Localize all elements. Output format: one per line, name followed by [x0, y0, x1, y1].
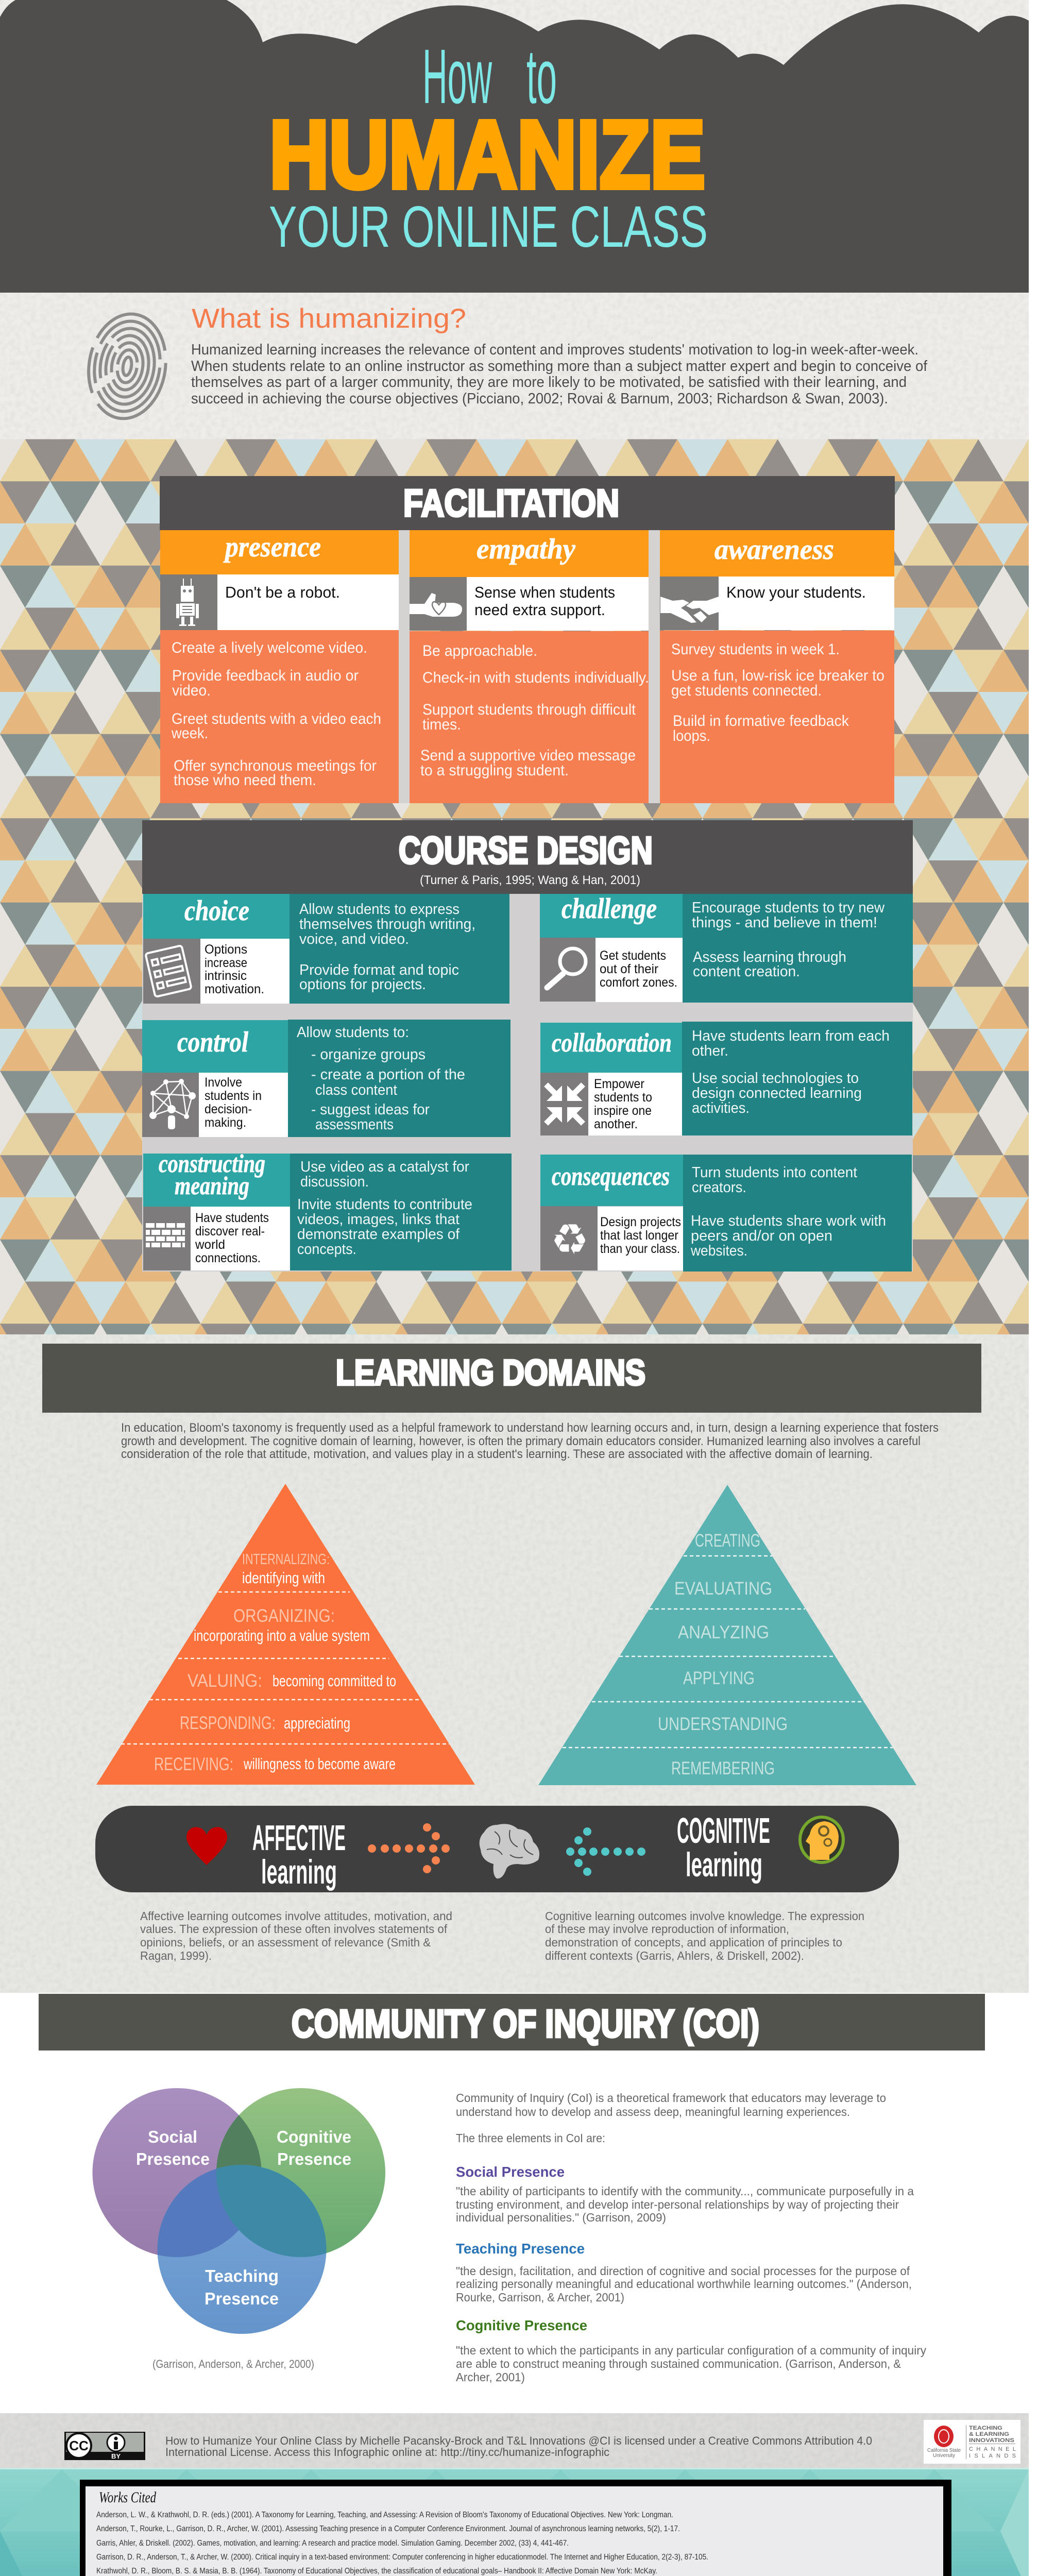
panel: learning domains: [42, 1344, 981, 1962]
heading: constructing meaning: constructing: [159, 1149, 265, 1178]
callout: sense when students need support: need extra support.: [474, 601, 605, 619]
text: consequences tips: [690, 1164, 886, 1259]
panel: facilitation: [160, 476, 895, 803]
panel: works cited background: [0, 2468, 1029, 2576]
column: presence: [160, 530, 399, 803]
callout: involve students: decision-: [205, 1102, 252, 1116]
block: cognitive presence definition: [456, 2317, 926, 2384]
heading: constructing meaning: [159, 1149, 265, 1200]
text: CoI explanation: [456, 2091, 886, 2145]
label: valuing: [188, 1671, 396, 1691]
callout: comfort zones: [600, 948, 677, 990]
heading bar: learning domains: LEARNING DOMAINS: [336, 1352, 645, 1393]
text: empathy tips: times.: [422, 716, 461, 733]
block: cognitive presence definition: are able to construct meaning through sustained communication. (Garrison, Anderson, &: [456, 2357, 901, 2370]
text: awareness tips: Build in formative feedback: [673, 713, 849, 730]
heading bar: facilitation: [160, 476, 895, 530]
text: affective outcomes: Affective learning outcomes involve attitudes, motivation, and: [140, 1909, 452, 1923]
callout: comfort zones: out of their: [600, 962, 658, 976]
text: empathy tips: to a struggling student.: [420, 762, 569, 779]
text: humanizing definition: Humanized learning increases the relevance of content and improves students' motivation to log-in week-after-week.: [191, 342, 918, 358]
text: bloom's taxonomy intro: growth and development. The cognitive domain of learning, however, is often the primary domain educators consider. Humanized learning also involves a careful: [121, 1434, 921, 1448]
callout: real-world connections: [195, 1211, 269, 1265]
chart: cognitive pyramid: [538, 1485, 916, 1785]
heading: works cited: Works Cited: [99, 2489, 157, 2506]
text: choice tips: options for projects.: [299, 976, 426, 993]
panel: header with cloud silhouette and title: to: [526, 33, 557, 120]
callout: design projects: than your class.: [600, 1242, 680, 1256]
callout: empower students: Empower: [594, 1077, 644, 1091]
labels: cognitive levels: REMEMBERING: [671, 1758, 775, 1778]
block: teaching presence definition: realizing personally meaningful and educational worthwhile learning outcomes." (Anderson,: [456, 2277, 912, 2291]
text: license statement: How to Humanize Your Online Class by Michelle Pacansky-Brock and T&L Innovations @CI is licensed under a Creative Commons Attribution 4.0: [165, 2434, 872, 2447]
callout: know your students: Know your students.: [726, 583, 866, 601]
text: control tips: [297, 1024, 465, 1133]
text: challenge tips: Assess learning through: [693, 949, 846, 965]
title: HUMANIZE: HUMANIZE: [269, 101, 705, 208]
text: consequences tips: Have students share work with: [691, 1213, 886, 1229]
text: awareness tips: Use a fun, low-risk ice breaker to: [671, 667, 884, 684]
panel: affective and cognitive pill: COGNITIVE: [677, 1810, 770, 1851]
text: collaboration tips: Have students learn from each: [692, 1028, 890, 1044]
text: constructing meaning tips: concepts.: [297, 1241, 356, 1258]
heading: what is humanizing: What is humanizing?: [192, 303, 466, 334]
callout: involve students: [205, 1075, 262, 1130]
callout: empower students: inspire one: [594, 1104, 652, 1118]
heading: control: control: [177, 1026, 248, 1058]
text: consequences tips: Turn students into content: [692, 1164, 857, 1181]
text: constructing meaning tips: videos, images, links that: [297, 1211, 460, 1228]
panel: affective and cognitive pill: AFFECTIVE: [252, 1818, 346, 1858]
callout: empower students: students to: [594, 1090, 652, 1105]
block: social presence definition: [456, 2164, 914, 2224]
panel: affective and cognitive pill: [95, 1806, 899, 1892]
label: internalizing: INTERNALIZING:: [242, 1551, 330, 1568]
text: presence tips: video.: [172, 682, 211, 699]
heading bar: course design: [142, 820, 913, 894]
logo: teaching and learning innovations: TEACHING: [969, 2425, 1002, 2431]
label: responding: appreciating: [284, 1714, 350, 1732]
text: awareness tips: Survey students in week 1.: [671, 641, 840, 658]
heading bar: course design: COURSE DESIGN: [399, 829, 653, 872]
text: references: Garris, Ahler, & Driskell. (2002). Games, motivation, and learning: A research and practice model. Simulation Gaming. December 2002, (33) 4, 441-467.: [96, 2539, 569, 2548]
callout: don't be a robot: Don't be a robot.: [225, 583, 340, 601]
card: control: [142, 1020, 511, 1137]
callout: options increase motivation: intrinsic: [205, 969, 247, 983]
callout: involve students: Involve: [205, 1075, 242, 1090]
text: presence tips: week.: [171, 725, 208, 742]
text: venn citation: (Garrison, Anderson, & Archer, 2000): [152, 2358, 314, 2370]
arrow: teal dots: [566, 1827, 645, 1876]
heading: collaboration: collaboration: [552, 1028, 672, 1058]
icon: network person: [149, 1079, 196, 1129]
column: awareness: [660, 530, 894, 803]
text: cognitive outcomes: demonstration of concepts, and application of principles to: [545, 1936, 842, 1949]
icon: magnifying glass: [547, 948, 586, 988]
callout: design projects: Design projects: [600, 1215, 681, 1229]
block: teaching presence definition: [456, 2241, 912, 2304]
text: license statement: International License. Access this Infographic online at: http://tiny.cc/humanize-infographic: [165, 2446, 609, 2459]
heading bar: facilitation: FACILITATION: [403, 482, 619, 524]
text: awareness tips: loops.: [673, 727, 710, 744]
panel: works cited: [80, 2480, 951, 2576]
heading: empathy: empathy: [477, 533, 576, 565]
label: cognitive presence: Presence: [277, 2149, 351, 2168]
callout: options increase motivation: increase: [205, 956, 247, 970]
text: collaboration tips: other.: [692, 1043, 728, 1059]
icon: inward arrows: [546, 1084, 583, 1124]
logo: teaching and learning innovations: University: [933, 2453, 955, 2459]
block: cognitive presence definition: "the extent to which the participants in any particular configuration of a community of inquiry: [456, 2344, 926, 2357]
label: cognitive presence: [277, 2127, 351, 2168]
card: constructing meaning: [143, 1149, 512, 1270]
logo: teaching and learning innovations: California State: [927, 2448, 961, 2453]
logo: teaching and learning innovations: ISLANDS: [969, 2453, 1016, 2459]
text: control tips: assessments: [315, 1116, 394, 1133]
text: affective outcomes: [140, 1909, 452, 1962]
text: CoI explanation: Community of Inquiry (CoI) is a theoretical framework that educators may leverage to: [456, 2091, 886, 2105]
callout: design projects: that last longer: [600, 1228, 678, 1243]
text: control tips: - create a portion of the: [311, 1066, 465, 1083]
icon: heart: [186, 1827, 227, 1865]
heading: challenge: challenge: [561, 893, 657, 925]
text: constructing meaning tips: [297, 1159, 472, 1258]
heading bar: community of inquiry: [39, 1994, 985, 2050]
icon: hand with heart: [410, 593, 462, 617]
icon: checklist: [145, 945, 192, 997]
panel: course design: [142, 820, 913, 1272]
text: presence tips: Provide feedback in audio or: [172, 667, 359, 684]
text: control tips: - suggest ideas for: [311, 1101, 430, 1118]
text: collaboration tips: Use social technologies to: [692, 1070, 859, 1087]
text: bloom's taxonomy intro: consideration of the role that attitude, motivation, and values play in a student's learning. These are associated with the affective domain of learning.: [121, 1447, 873, 1461]
text: license statement: [165, 2434, 872, 2459]
text: choice tips: voice, and video.: [299, 931, 409, 947]
text: presence tips: [171, 639, 381, 789]
label: organizing: incorporating into a value system: [194, 1626, 370, 1645]
text: cognitive outcomes: different contexts (Garris, Ahlers, & Driskell, 2002).: [545, 1949, 804, 1962]
label: internalizing: [242, 1551, 330, 1587]
label: cognitive presence: Cognitive: [277, 2127, 351, 2146]
chart: affective pyramid: [96, 1484, 475, 1785]
text: collaboration tips: design connected learning: [692, 1085, 862, 1101]
title: How to: How: [422, 33, 492, 120]
block: social presence definition: individual personalities." (Garrison, 2009): [456, 2211, 666, 2224]
label: teaching presence: Teaching: [205, 2266, 279, 2285]
text: challenge tips: content creation.: [693, 963, 800, 980]
text: consequences tips: websites.: [690, 1243, 747, 1259]
text: bloom's taxonomy intro: In education, Bloom's taxonomy is frequently used as a helpful framework to understand how learning occurs and, in turn, design a learning experience that fosters: [121, 1421, 939, 1435]
labels: cognitive levels: APPLYING: [683, 1668, 755, 1688]
block: social presence definition: Social Presence: [456, 2164, 565, 2180]
text: bloom's taxonomy intro: [121, 1421, 939, 1461]
callout: real-world connections: Have students: [195, 1211, 269, 1225]
text: presence tips: Greet students with a video each: [172, 710, 381, 727]
text: presence tips: those who need them.: [174, 772, 316, 789]
label: organizing: ORGANIZING:: [233, 1606, 335, 1626]
icon: brain: [480, 1824, 539, 1878]
text: affective outcomes: opinions, beliefs, or an assessment of relevance (Smith &: [140, 1936, 431, 1949]
block: teaching presence definition: Teaching Presence: [456, 2241, 585, 2257]
block: cognitive presence definition: Cognitive Presence: [456, 2317, 587, 2333]
text: control tips: class content: [315, 1082, 397, 1098]
icon: head with gears: [800, 1817, 843, 1862]
text: humanizing definition: When students relate to an online instructor as something more than a subject matter expert and begin to conceive of: [191, 358, 928, 375]
text: references: [96, 2511, 765, 2576]
text: references: Anderson, L. W., & Krathwohl, D. R. (eds.) (2001). A Taxonomy for Learning, Teaching, and Assessing: A Revision of Bloom's Taxonomy of Educational Objectives. New York: Longman.: [96, 2511, 673, 2519]
arrow: orange dots: [368, 1823, 450, 1873]
label: responding: RESPONDING:: [180, 1713, 276, 1733]
panel: header with cloud silhouette and title: [0, 0, 1029, 293]
heading bar: course design: (Turner & Paris, 1995; Wang & Han, 2001): [420, 873, 640, 887]
labels: cognitive levels: UNDERSTANDING: [658, 1714, 788, 1734]
text: consequences tips: creators.: [692, 1179, 746, 1196]
text: constructing meaning tips: discussion.: [300, 1174, 369, 1190]
logo: teaching and learning innovations: & LEARNING: [969, 2431, 1009, 2437]
text: constructing meaning tips: demonstrate examples of: [297, 1226, 460, 1243]
heading bar: community of inquiry: COMMUNITY OF INQUIRY (COI): [292, 2002, 759, 2046]
icon: creative commons badge: BY: [111, 2452, 121, 2460]
text: awareness tips: get students connected.: [671, 682, 822, 699]
callout: options increase motivation: [205, 942, 264, 996]
callout: empower students: another.: [594, 1117, 638, 1131]
card: choice: [143, 894, 509, 1004]
callout: sense when students need support: Sense when students: [474, 583, 615, 601]
label: cognitive learning: learning: [686, 1845, 762, 1884]
icon: recycle: ♻: [551, 1215, 589, 1264]
callout: real-world connections: world: [195, 1238, 225, 1252]
panel: community of inquiry: [39, 1994, 985, 2384]
callout: involve students: students in: [205, 1089, 262, 1103]
text: references: Anderson, T., Rourke, L., Garrison, D. R., Archer, W. (2001). Assessing Teaching presence in a Computer Conference Environment. Journal of asynchronous learning networks, 5(2), 1-17.: [96, 2524, 680, 2533]
text: challenge tips: [692, 900, 885, 980]
text: collaboration tips: activities.: [692, 1100, 750, 1116]
text: control tips: - organize groups: [311, 1046, 426, 1063]
panel: what is humanizing intro: [81, 303, 928, 424]
text: collaboration tips: [692, 1028, 890, 1116]
labels: cognitive levels: [658, 1531, 788, 1778]
heading: constructing meaning: meaning: [175, 1171, 249, 1200]
heading bar: learning domains: [42, 1344, 981, 1413]
text: presence tips: Create a lively welcome video.: [172, 639, 367, 656]
text: humanizing definition: succeed in achieving the course objectives (Picciano, 2002; Rovai & Barnum, 2003; Richardson & Swan, 2003).: [191, 391, 888, 407]
text: constructing meaning tips: Use video as a catalyst for: [300, 1159, 469, 1175]
callout: empower students: [594, 1077, 652, 1131]
text: control tips: Allow students to:: [297, 1024, 409, 1041]
labels: cognitive levels: EVALUATING: [674, 1579, 772, 1599]
callout: real-world connections: discover real-: [195, 1224, 265, 1239]
chart: venn diagram: [93, 2088, 385, 2334]
logo: teaching and learning innovations: [924, 2420, 1020, 2464]
text: affective outcomes: Ragan, 1999).: [140, 1949, 212, 1962]
text: cognitive outcomes: [545, 1909, 864, 1962]
icon: handshake: [660, 597, 719, 623]
label: social presence: Presence: [136, 2149, 210, 2168]
icon: robot: [176, 579, 199, 626]
heading: presence: presence: [223, 531, 321, 563]
label: receiving: [154, 1754, 396, 1774]
block: teaching presence definition: Rourke, Garrison, & Archer, 2001): [456, 2291, 624, 2304]
panel: license footer: [0, 2413, 1029, 2468]
label: receiving: RECEIVING:: [154, 1754, 233, 1774]
text: empathy tips: Support students through difficult: [422, 701, 636, 718]
label: valuing: VALUING:: [188, 1671, 262, 1691]
label: organizing: [194, 1606, 370, 1645]
label: affective learning: learning: [261, 1853, 337, 1891]
text: CoI explanation: understand how to develop and assess deep, meaningful learning experiences.: [456, 2105, 850, 2119]
block: cognitive presence definition: Archer, 2001): [456, 2370, 525, 2384]
icon: creative commons badge: [64, 2432, 145, 2460]
logo: teaching and learning innovations: CHANNEL: [969, 2446, 1016, 2452]
text: references: Garrison, D. R., Anderson, T., & Archer, W. (2000). Critical inquiry in a text-based environment: Computer conferencing in higher educationmodel. The Internet and Higher Education, 2(2-3), 87-105.: [96, 2553, 708, 2562]
heading: consequences: consequences: [552, 1162, 670, 1191]
text: cognitive outcomes: of these may involve reproduction of information,: [545, 1922, 789, 1936]
text: empathy tips: [420, 642, 649, 779]
label: teaching presence: [205, 2266, 279, 2308]
label: cognitive learning: [677, 1810, 770, 1884]
label: valuing: becoming committed to: [273, 1672, 396, 1690]
label: receiving: willingness to become aware: [243, 1755, 396, 1773]
cloud shape: [0, 0, 1029, 293]
panel: paper background of header and intro: [0, 0, 1029, 443]
text: empathy tips: Be approachable.: [422, 642, 537, 659]
block: teaching presence definition: "the design, facilitation, and direction of cognitive and social processes for the purpose of: [456, 2264, 910, 2278]
callout: design projects: [600, 1215, 681, 1256]
text: affective outcomes: values. The expression of these often involves statements of: [140, 1922, 448, 1936]
text: consequences tips: peers and/or on open: [691, 1228, 832, 1244]
block: social presence definition: "the ability of participants to identify with the community..., communicate purposefully in a: [456, 2184, 914, 2198]
logo: teaching and learning innovations: INNOVATIONS: [969, 2437, 1014, 2444]
text: choice tips: Provide format and topic: [299, 962, 459, 978]
icon: creative commons badge: CC: [69, 2438, 89, 2453]
callout: real-world connections: connections.: [195, 1251, 261, 1265]
label: social presence: Social: [148, 2127, 197, 2146]
callout: comfort zones: Get students: [600, 948, 666, 963]
callout: sense when students need support: [474, 583, 615, 619]
label: teaching presence: Presence: [205, 2289, 279, 2308]
heading: choice: choice: [184, 895, 249, 927]
card: challenge: [540, 893, 913, 1003]
text: challenge tips: things - and believe in them!: [692, 914, 877, 931]
text: humanizing definition: themselves as part of a larger community, they are more likely to be motivated, be satisfied with their learning, and: [191, 374, 907, 391]
icon: fingerprint: [81, 309, 173, 424]
column: empathy: [410, 530, 649, 803]
text: choice tips: themselves through writing,: [299, 916, 475, 933]
text: references: Krathwohl, D. R., Bloom, B. S. & Masia, B. B. (1964). Taxonomy of Educational Objectives, the classification of educational goals– Handbook II: Affective Domain New York: McKay.: [96, 2567, 657, 2575]
text: humanizing definition: [191, 342, 928, 407]
text: cognitive outcomes: Cognitive learning outcomes involve knowledge. The expression: [545, 1909, 864, 1923]
text: choice tips: [299, 901, 475, 993]
label: affective learning: [252, 1818, 346, 1891]
text: challenge tips: Encourage students to try new: [692, 900, 885, 916]
labels: cognitive levels: CREATING: [695, 1531, 760, 1551]
label: social presence: [136, 2127, 210, 2168]
labels: cognitive levels: ANALYZING: [678, 1622, 769, 1642]
callout: options increase motivation: Options: [205, 942, 247, 957]
card: collaboration: [540, 1022, 912, 1136]
text: awareness tips: [671, 641, 884, 744]
text: empathy tips: Check-in with students individually.: [422, 669, 649, 686]
callout: options increase motivation: motivation.: [205, 982, 264, 996]
text: presence tips: Offer synchronous meetings for: [174, 757, 377, 774]
card: consequences: [540, 1155, 912, 1272]
label: internalizing: identifying with: [242, 1569, 325, 1587]
text: CoI explanation: The three elements in CoI are:: [456, 2131, 605, 2145]
panel: learning domains background: [0, 1334, 1029, 1993]
text: constructing meaning tips: Invite students to contribute: [297, 1196, 472, 1213]
text: choice tips: Allow students to express: [299, 901, 460, 918]
callout: comfort zones: comfort zones.: [600, 975, 677, 990]
panel: triangle pattern background: [0, 439, 1029, 1334]
block: social presence definition: trusting environment, and develop inter-personal relationships by way of projecting their: [456, 2198, 899, 2211]
title: YOUR ONLINE CLASS: YOUR ONLINE CLASS: [269, 194, 708, 259]
text: empathy tips: Send a supportive video message: [420, 747, 636, 764]
heading: awareness: awareness: [714, 534, 834, 566]
callout: involve students: making.: [205, 1115, 246, 1130]
icon: brick wall: [146, 1223, 185, 1247]
